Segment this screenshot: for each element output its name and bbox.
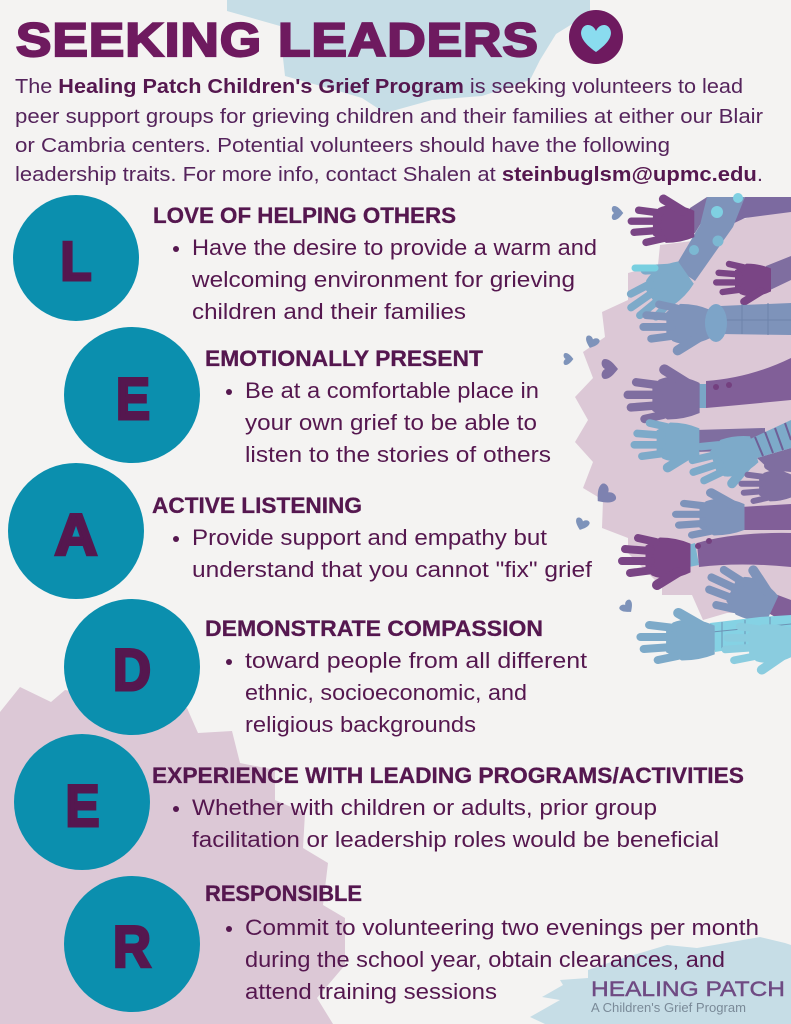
bullet text: religious backgrounds <box>245 712 476 737</box>
bullet text: children and their families <box>192 299 466 324</box>
right mauve blob <box>575 205 791 620</box>
arm and hand 4 <box>643 303 791 350</box>
heading: EMOTIONALLY PRESENT <box>205 346 484 371</box>
arm and hand 2 <box>618 252 696 326</box>
letter circle L: L <box>60 230 92 292</box>
letter circle E <box>14 734 150 870</box>
letter circle E <box>64 327 200 463</box>
bullet text: Have the desire to provide a warm and <box>192 235 597 260</box>
bullet text: Whether with children or adults, prior group <box>192 795 657 820</box>
letter circle L <box>13 195 139 321</box>
heading: LOVE OF HELPING OTHERS <box>153 203 456 228</box>
intro paragraph <box>15 76 763 186</box>
arm and hand 7 <box>686 420 791 494</box>
top blue blob <box>227 0 590 113</box>
bullet text <box>226 648 587 737</box>
title: SEEKING LEADERS <box>16 13 539 66</box>
arm and hand 5 <box>628 358 791 419</box>
bullet text: facilitation or leadership roles would be beneficial <box>192 827 719 852</box>
letter circle A: A <box>54 503 98 568</box>
letter circle D: D <box>113 638 151 703</box>
hearts <box>564 206 636 616</box>
logo <box>591 978 785 1015</box>
bullet text <box>226 378 551 467</box>
letter circle A <box>8 463 144 599</box>
bullet text <box>173 235 597 324</box>
bottom right blue blob <box>530 937 791 1024</box>
letter circle R <box>64 876 200 1012</box>
bullet text: understand that you cannot "fix" grief <box>192 557 593 582</box>
logo: HEALING PATCH <box>591 978 785 1001</box>
arm and hand 8 <box>742 466 791 501</box>
icon: heart in circle <box>569 10 623 64</box>
bottom left mauve blob <box>0 687 345 1024</box>
item R <box>64 876 759 1012</box>
bullet text: Commit to volunteering two evenings per month <box>245 915 759 940</box>
letter circle D <box>64 599 200 735</box>
intro paragraph: The Healing Patch Children's Grief Program is seeking volunteers to lead <box>15 76 743 98</box>
intro paragraph: or Cambria centers. Potential volunteers should have the following <box>15 135 670 157</box>
item A <box>8 463 593 599</box>
item L <box>13 195 597 324</box>
heading: EXPERIENCE WITH LEADING PROGRAMS/ACTIVITIES <box>152 763 744 788</box>
letter circle R: R <box>113 915 151 980</box>
item E <box>64 327 551 467</box>
letter circle E: E <box>116 367 150 432</box>
letter circle E: E <box>66 774 100 839</box>
bullet text <box>173 525 593 582</box>
arm and hand 11 <box>702 556 791 627</box>
arm and hand 9 <box>676 493 791 535</box>
bullet text: Provide support and empathy but <box>192 525 547 550</box>
arm and hand 3 <box>716 256 791 302</box>
heading: RESPONSIBLE <box>205 881 362 906</box>
bullet text: toward people from all different <box>245 648 587 673</box>
intro paragraph: peer support groups for grieving children and their families at either our Blair <box>15 106 763 128</box>
arm and hand 12 <box>641 613 791 660</box>
item D <box>64 599 587 737</box>
bullet text: ethnic, socioeconomic, and <box>245 680 527 705</box>
intro paragraph: leadership traits. For more info, contact Shalen at steinbuglsm@upmc.edu . <box>15 164 763 186</box>
illustration: reaching hands <box>564 193 791 672</box>
arm and hand 13 <box>724 623 791 672</box>
arm and hand 10 <box>622 533 791 585</box>
bullet text <box>226 915 759 1004</box>
arm and hand 6 <box>634 423 765 468</box>
bullet text: listen to the stories of others <box>245 442 551 467</box>
bullet text <box>173 795 719 852</box>
bullet text: during the school year, obtain clearances, and <box>245 947 725 972</box>
bullet text: Be at a comfortable place in <box>245 378 539 403</box>
heading: DEMONSTRATE COMPASSION <box>205 616 543 641</box>
bullet text: welcoming environment for grieving <box>191 267 575 292</box>
arm and hand 1 <box>631 193 791 281</box>
item E2 <box>14 734 744 870</box>
heading: ACTIVE LISTENING <box>152 493 362 518</box>
logo: A Children's Grief Program <box>591 1001 746 1015</box>
bullet text: attend training sessions <box>245 979 497 1004</box>
bullet text: your own grief to be able to <box>245 410 537 435</box>
